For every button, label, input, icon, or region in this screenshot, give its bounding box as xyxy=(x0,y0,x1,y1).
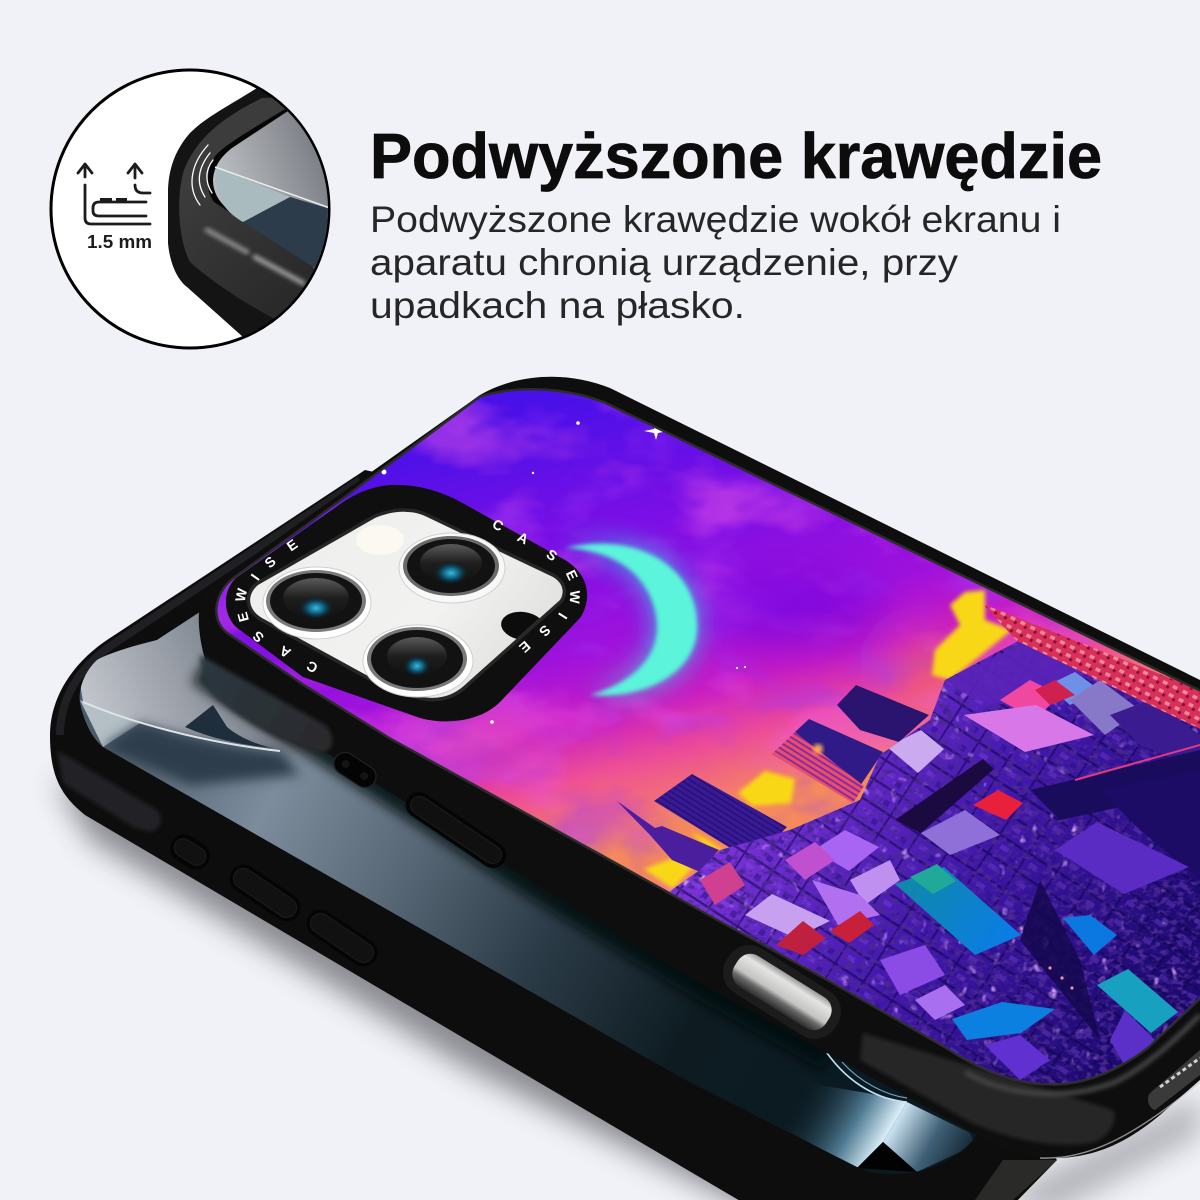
rear phone button: action xyxy=(165,829,215,875)
dark ground right xyxy=(1100,770,1200,880)
bottom black triangle xyxy=(857,1142,917,1172)
lens: left xyxy=(263,567,371,639)
body text: upadkach na płasko. xyxy=(370,285,745,326)
case button: silver power xyxy=(714,936,850,1048)
callout circle: raised edge close-up xyxy=(51,60,350,348)
case bottom lip xyxy=(1040,1082,1200,1158)
wallpaper highlight curve xyxy=(83,702,280,751)
sensor hole xyxy=(499,609,547,643)
skyline: spire xyxy=(617,801,719,872)
ground shadow under phones xyxy=(55,780,1200,1200)
CASEWISE lettering: S xyxy=(536,622,554,640)
CASEWISE lettering: I xyxy=(555,610,571,622)
road dark band xyxy=(1030,750,1200,820)
body text xyxy=(370,199,1061,326)
CASEWISE lettering: E xyxy=(284,536,300,554)
CASEWISE lettering: A xyxy=(277,643,293,661)
skyline: lit tower xyxy=(772,732,864,803)
crescent moon xyxy=(565,544,697,696)
moon glow xyxy=(565,544,697,696)
pale wedge xyxy=(80,700,140,747)
yellow clouds xyxy=(644,590,1012,889)
skyline: wide tower xyxy=(654,774,787,848)
icon: raised edge diagram with 1.5 mm label xyxy=(78,164,152,252)
bottom glow right xyxy=(883,1102,975,1172)
camera plateau xyxy=(250,512,563,698)
lilac block mid xyxy=(814,830,879,871)
case camera side translucent panel xyxy=(200,655,332,753)
street lights xyxy=(1048,966,1074,990)
gray wallpaper top xyxy=(80,612,300,754)
dark avenue xyxy=(1020,880,1100,1040)
dark wallpaper fold xyxy=(103,723,300,785)
red grid building xyxy=(983,604,1200,729)
lens: bottom xyxy=(363,625,473,697)
CASEWISE lettering: S xyxy=(261,553,279,571)
CASEWISE lettering: S xyxy=(544,546,560,564)
CASEWISE lettering: I xyxy=(247,571,263,583)
white roof xyxy=(745,894,830,938)
camera island xyxy=(226,485,587,721)
case shadow on screen xyxy=(200,670,830,1057)
body text: aparatu chronią urządzenie, przy xyxy=(370,242,959,283)
screen-side art panel xyxy=(200,370,1200,1110)
large flat roof xyxy=(1055,822,1189,894)
case button: mute slot xyxy=(330,748,380,792)
case button: side key xyxy=(401,787,511,873)
CASEWISE lettering: E xyxy=(234,610,252,624)
red sign xyxy=(973,790,1023,820)
pale billboard xyxy=(921,810,1000,855)
stars xyxy=(382,421,746,724)
lilac blocks lower xyxy=(880,945,945,995)
lens: top right xyxy=(399,533,505,603)
rear phone body xyxy=(50,470,1057,1200)
sky clouds xyxy=(420,575,960,820)
front case body xyxy=(199,377,1200,1158)
sky cloud texture xyxy=(218,394,1200,1042)
rear phone button: volume up xyxy=(224,859,306,927)
CASEWISE lettering: E xyxy=(563,567,581,583)
phone corner close-up xyxy=(168,88,328,336)
CASEWISE lettering xyxy=(232,516,583,676)
CASEWISE lettering: W xyxy=(232,586,250,603)
skyline: mid tower xyxy=(795,719,883,786)
skyline: dark tower xyxy=(837,685,929,742)
CASEWISE lettering: A xyxy=(515,529,531,547)
body text: Podwyższone krawędzie wokół ekranu i xyxy=(370,199,1061,240)
CASEWISE lettering: C xyxy=(490,516,506,534)
CASEWISE lettering: C xyxy=(304,658,320,676)
CASEWISE lettering: S xyxy=(249,628,267,646)
case bottom corner rim highlight xyxy=(965,1015,1200,1094)
rear phone screen xyxy=(80,612,976,1174)
bottom glow left xyxy=(794,1086,906,1168)
bottom streaks xyxy=(827,1053,907,1102)
red signs lower xyxy=(776,921,826,955)
label: 1.5 mm: 1.5 mm xyxy=(87,232,152,252)
raised ring xyxy=(226,485,587,721)
CASEWISE lettering: W xyxy=(567,590,583,605)
lilac block top xyxy=(887,730,944,773)
purple buildings top xyxy=(946,645,1200,757)
sky gradient xyxy=(200,370,1200,1100)
rear phone button: volume down xyxy=(301,904,383,972)
bottom port xyxy=(1148,1050,1200,1110)
black sign band xyxy=(895,759,994,833)
case corner translucent band xyxy=(860,1033,1114,1145)
impact arcs xyxy=(192,145,213,205)
city mass xyxy=(670,641,1200,1084)
rear phone corner band xyxy=(57,750,161,832)
heading: Podwyższone krawędzie xyxy=(370,120,1102,192)
rear phone rim highlight xyxy=(60,480,360,735)
CASEWISE lettering: E xyxy=(516,638,534,656)
blue blocks xyxy=(895,867,1021,955)
flash xyxy=(356,525,404,555)
rear phone metal edge bottom right xyxy=(975,1160,1057,1200)
